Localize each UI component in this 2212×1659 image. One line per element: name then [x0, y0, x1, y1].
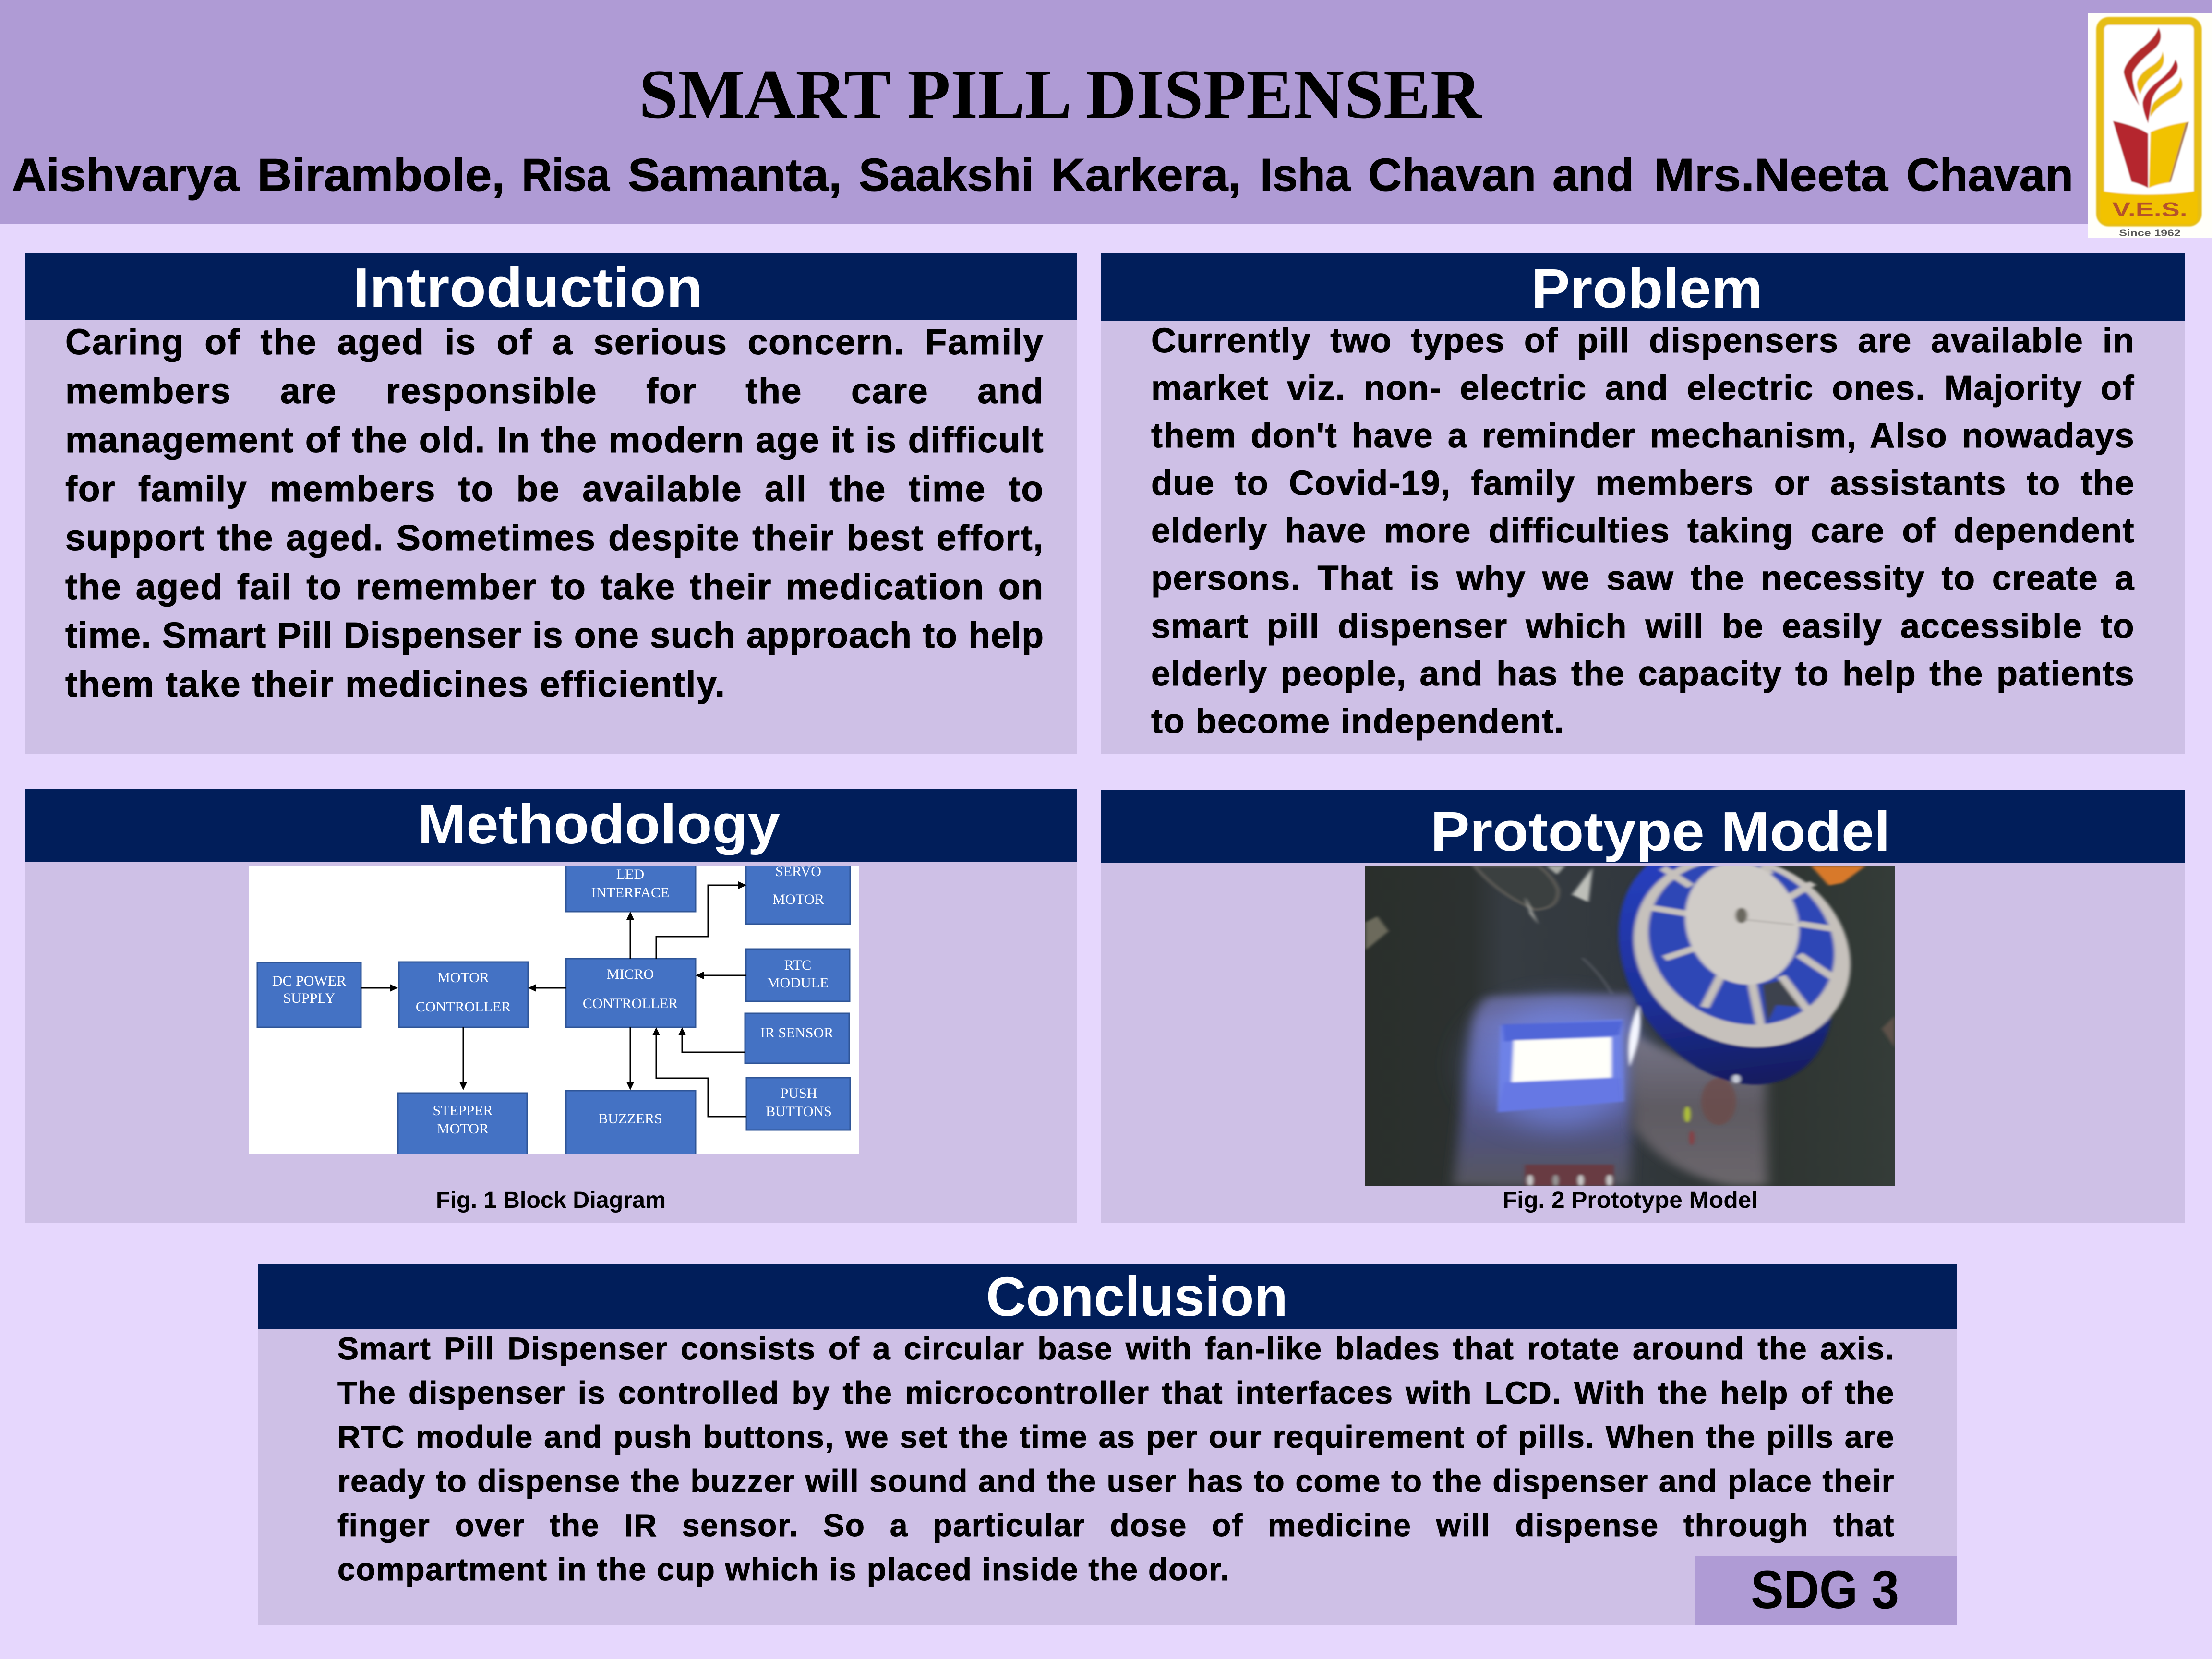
- box: IR sensor: [745, 1013, 849, 1063]
- text block: conclusion: finger over the IR sensor. So a particular dose of medicine will dispense through that: [337, 1507, 1895, 1543]
- text block: introduction: time. Smart Pill Dispenser is one such approach to help: [65, 615, 1044, 655]
- box: buzzers: BUZZERS: [598, 1111, 662, 1127]
- authors: Isha: [1260, 149, 1351, 201]
- authors: Samanta,: [628, 149, 842, 201]
- photo: prototype: [1365, 866, 1895, 1186]
- text block: conclusion: RTC module and push buttons, we set the time as per our requirement of pills. When the pills are: [337, 1419, 1895, 1455]
- box: DC power supply: [257, 962, 361, 1027]
- box: stepper motor: [398, 1093, 527, 1160]
- panel: introduction: [25, 253, 1077, 754]
- authors: Risa: [522, 149, 610, 201]
- logo lettering: V.E.S.: [2112, 198, 2188, 221]
- box: push buttons: [746, 1078, 850, 1130]
- heading: introduction: [25, 253, 1077, 320]
- text block: problem: Currently two types of pill dispensers are available in: [1151, 322, 2135, 360]
- title: SMART PILL DISPENSER: [639, 55, 1482, 133]
- text block: introduction: Caring of the aged is of a serious concern. Family: [65, 322, 1044, 362]
- caption: fig 1: Fig. 1 Block Diagram: [436, 1188, 666, 1213]
- heading: problem: [1101, 253, 2185, 321]
- box: RTC module: [746, 949, 850, 1001]
- panel: methodology: [25, 789, 1077, 1223]
- text block: problem: smart pill dispenser which will be easily accessible to: [1151, 607, 2135, 646]
- text block: conclusion: Smart Pill Dispenser consists of a circular base with fan-like blades that rotate around the axis.: [337, 1331, 1895, 1366]
- badge: SDG 3: [1695, 1556, 1957, 1625]
- authors: Saakshi: [859, 149, 1034, 201]
- text block: problem: due to Covid-19, family members or assistants to the: [1151, 464, 2135, 503]
- text block: introduction: for family members to be available all the time to: [65, 469, 1044, 509]
- heading: conclusion: [258, 1264, 1957, 1329]
- text block: problem: persons. That is why we saw the necessity to create a: [1151, 559, 2135, 598]
- text block: introduction: management of the old. In the modern age it is difficult: [65, 420, 1044, 460]
- text block: problem: to become independent.: [1151, 702, 1564, 741]
- box: motor controller: [399, 962, 528, 1027]
- text block: conclusion: ready to dispense the buzzer will sound and the user has to come to the dispenser and place their: [337, 1463, 1895, 1499]
- text block: problem: them don't have a reminder mechanism, Also nowadays: [1151, 417, 2135, 455]
- heading: introduction: Introduction: [353, 256, 703, 319]
- heading: conclusion: Conclusion: [986, 1265, 1288, 1328]
- box: motor controller: CONTROLLER: [416, 999, 511, 1015]
- LCD glow: [1479, 1001, 1640, 1130]
- caption: fig 2: Fig. 2 Prototype Model: [1503, 1188, 1758, 1213]
- box: DC power supply: SUPPLY: [283, 990, 335, 1006]
- box: micro controller: MICRO: [607, 966, 654, 982]
- box: LED interface: [566, 859, 696, 912]
- box: servo motor: [746, 859, 850, 924]
- block diagram: [249, 866, 859, 1154]
- text block: introduction: them take their medicines efficiently.: [65, 664, 726, 704]
- box: motor controller: MOTOR: [437, 970, 489, 986]
- text block: problem: elderly people, and has the capacity to help the patients: [1151, 655, 2135, 693]
- arrows: [361, 881, 746, 1117]
- box: stepper motor: STEPPER: [433, 1103, 493, 1118]
- box: LED interface: INTERFACE: [591, 885, 669, 901]
- box: stepper motor: MOTOR: [437, 1121, 489, 1137]
- text block: conclusion: compartment in the cup which is placed inside the door.: [337, 1551, 1230, 1587]
- panel: prototype model: [1101, 790, 2185, 1223]
- box: buzzers: [566, 1091, 696, 1160]
- box: micro controller: CONTROLLER: [583, 996, 678, 1011]
- text block: introduction: members are responsible for the care and: [65, 371, 1044, 411]
- cylinder: [1628, 1031, 1767, 1186]
- authors: and: [1552, 149, 1634, 201]
- text block: conclusion: [337, 1326, 1895, 1591]
- header band: [0, 0, 2212, 224]
- box: RTC module: MODULE: [767, 975, 829, 991]
- text block: introduction: the aged fail to remember to take their medication on: [65, 566, 1044, 607]
- authors: Karkera,: [1051, 149, 1241, 201]
- text block: problem: [1151, 322, 2135, 741]
- authors: Aishvarya: [12, 149, 240, 201]
- box: LED interface: LED: [616, 866, 644, 882]
- heading: methodology: [25, 789, 1077, 862]
- box: push buttons: BUTTONS: [766, 1104, 832, 1119]
- text block: conclusion: The dispenser is controlled by the microcontroller that interfaces with LCD. With the help of the: [337, 1375, 1895, 1410]
- heading: prototype model: [1101, 790, 2185, 863]
- badge: SDG 3: SDG 3: [1751, 1560, 1899, 1620]
- authors: [12, 149, 2073, 201]
- box: DC power supply: DC POWER: [272, 973, 346, 989]
- box: RTC module: RTC: [784, 957, 811, 973]
- text block: introduction: support the aged. Sometimes despite their best effort,: [65, 517, 1044, 558]
- text block: problem: market viz. non- electric and electric ones. Majority of: [1151, 369, 2135, 408]
- text block: introduction: [65, 322, 1044, 704]
- heading: problem: Problem: [1531, 257, 1763, 320]
- heading: methodology: Methodology: [418, 793, 780, 855]
- box: push buttons: PUSH: [781, 1085, 817, 1101]
- authors: Birambole,: [257, 149, 505, 201]
- authors: Chavan: [1906, 149, 2073, 201]
- box: micro controller: [566, 959, 696, 1027]
- authors: Mrs.Neeta: [1654, 149, 1888, 201]
- logo: V.E.S.: [2088, 13, 2212, 238]
- authors: Chavan: [1368, 149, 1536, 201]
- box: IR sensor: IR SENSOR: [760, 1025, 833, 1041]
- device body: [1453, 994, 1636, 1186]
- panel: conclusion: [258, 1264, 1957, 1625]
- heading: prototype model: Prototype Model: [1431, 800, 1890, 863]
- panel: problem: [1101, 253, 2185, 754]
- text block: problem: elderly have more difficulties taking care of dependent: [1151, 512, 2135, 550]
- box: servo motor: MOTOR: [772, 891, 824, 907]
